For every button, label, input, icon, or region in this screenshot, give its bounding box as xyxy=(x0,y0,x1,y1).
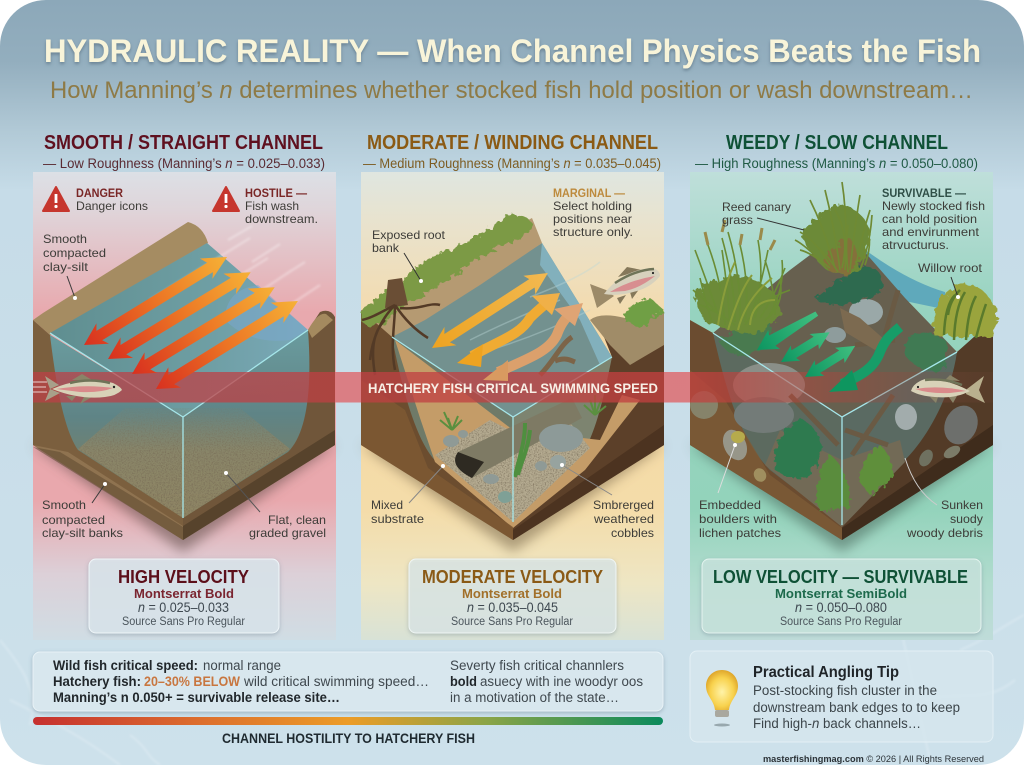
label: marginal: Select holding xyxy=(553,199,632,213)
label: marginal xyxy=(553,186,633,239)
text: left notes: normal range xyxy=(203,658,281,673)
heading: smooth channel: SMOOTH / STRAIGHT CHANNEL xyxy=(44,132,323,154)
label: survivable: atrvucturus. xyxy=(882,238,949,252)
panel: weedy slow channel xyxy=(690,172,998,640)
text: right notes: bold xyxy=(450,674,477,689)
card: moderate velocity: Montserrat Bold xyxy=(462,587,562,601)
text: left notes: 20–30% BELOW xyxy=(144,674,240,689)
label: reed canary grass: grass xyxy=(722,213,753,227)
card: moderate velocity: n = 0.035–0.045 xyxy=(467,600,558,615)
heading: weedy channel xyxy=(695,132,978,171)
label: banks: compacted xyxy=(42,513,105,527)
label: embedded boulders: lichen patches xyxy=(699,526,781,540)
top grass tuft xyxy=(795,182,872,275)
critical swimming speed band: HATCHERY FISH CRITICAL SWIMMING SPEED xyxy=(368,380,658,396)
panel: practical angling tip xyxy=(690,651,993,742)
text: right notes: asuecy with ine woodyr oos xyxy=(480,674,643,689)
label: survivable: Newly stocked fish xyxy=(882,199,985,213)
text: tip xyxy=(753,664,960,731)
text: left notes: wild critical swimming speed… xyxy=(243,674,429,689)
hostility gradient bar xyxy=(33,717,663,725)
heading: smooth channel: — Low Roughness (Manning’s n = 0.025–0.033) xyxy=(43,156,325,171)
fish: weedy channel xyxy=(911,375,985,403)
label: danger: Danger icons xyxy=(76,199,148,213)
block: winding channel cross-section xyxy=(361,214,664,552)
text: tip: Practical Angling Tip xyxy=(753,664,899,681)
label: exposed root bank: bank xyxy=(372,241,400,255)
block: weedy channel cross-section xyxy=(690,182,998,552)
fish: winding channel xyxy=(590,267,660,308)
label: cobbles: weathered xyxy=(593,512,654,526)
label: exposed root bank xyxy=(372,228,446,283)
card: high velocity: Source Sans Pro Regular xyxy=(122,616,245,628)
label: reed canary grass xyxy=(722,200,804,230)
text: right notes xyxy=(450,658,643,705)
label: sunken woody debris: suody xyxy=(950,512,983,526)
footer credit: masterfishingmag.com © 2026 | All Rights Reserved xyxy=(763,754,984,765)
label: mixed substrate: Mixed xyxy=(371,498,403,512)
arrows: moderate velocity xyxy=(426,264,583,381)
card: high velocity: n = 0.025–0.033 xyxy=(138,600,229,615)
label: gravel: graded gravel xyxy=(249,526,326,540)
label: marginal: structure only. xyxy=(553,225,633,239)
panel: smooth straight channel xyxy=(33,172,336,640)
text: right notes: in a motivation of the state… xyxy=(450,690,619,705)
label: clay-silt top xyxy=(43,232,106,300)
label: hostile: Fish wash xyxy=(245,199,299,213)
label: clay-silt top: clay-silt xyxy=(43,260,89,274)
arrows: low velocity xyxy=(751,304,900,392)
critical swimming speed band xyxy=(33,372,993,402)
label: cobbles: cobbles xyxy=(611,526,654,540)
text: left notes: Hatchery fish: xyxy=(53,674,141,689)
heading: moderate channel: — Medium Roughness (Manning’s n = 0.035–0.045) xyxy=(363,156,661,171)
label: marginal: MARGINAL — xyxy=(553,186,625,200)
label: reed canary grass: Reed canary xyxy=(722,200,791,214)
label: banks xyxy=(42,482,123,540)
title: HYDRAULIC REALITY — When Channel Physics Beats the Fish xyxy=(44,33,981,69)
card: moderate velocity: MODERATE VELOCITY xyxy=(422,567,603,587)
bar caption: CHANNEL HOSTILITY TO HATCHERY FISH xyxy=(222,731,475,746)
text: left notes: Manning’s n 0.050+ = survivable release site… xyxy=(53,690,340,705)
card: moderate velocity xyxy=(409,559,616,633)
heading: smooth channel xyxy=(43,132,325,171)
panel: critical speed notes xyxy=(33,652,663,711)
card: low velocity: Montserrat SemiBold xyxy=(775,587,907,601)
label: danger xyxy=(76,186,148,213)
label: sunken woody debris: Sunken xyxy=(941,498,983,512)
grass bank xyxy=(362,214,532,326)
stump and roots xyxy=(385,278,408,308)
heading: weedy channel: WEEDY / SLOW CHANNEL xyxy=(726,132,948,154)
card: low velocity: n = 0.050–0.080 xyxy=(795,600,887,615)
label: hostile xyxy=(245,186,318,226)
label: willow root xyxy=(918,261,983,299)
label: danger: DANGER xyxy=(76,186,123,200)
log xyxy=(458,398,582,478)
fish: smooth channel xyxy=(33,374,122,404)
card: high velocity: HIGH VELOCITY xyxy=(118,567,249,587)
card: moderate velocity: Source Sans Pro Regular xyxy=(451,616,573,628)
cobbles xyxy=(443,424,583,503)
label: embedded boulders: boulders with xyxy=(699,512,777,526)
label: embedded boulders xyxy=(699,443,781,540)
label: clay-silt top: compacted xyxy=(43,246,106,260)
text: tip: downstream bank edges to to keep xyxy=(753,700,960,715)
label: exposed root bank: Exposed root xyxy=(372,228,446,242)
label: willow root: Willow root xyxy=(918,261,983,275)
sunken logs xyxy=(790,290,898,455)
label: embedded boulders: Embedded xyxy=(699,498,761,512)
label: survivable: SURVIVABLE — xyxy=(882,186,966,200)
arrows: high velocity xyxy=(77,246,304,399)
text: tip: Find high-n back channels… xyxy=(753,716,921,731)
label: mixed substrate xyxy=(371,464,445,526)
label: sunken woody debris xyxy=(905,458,983,540)
card: low velocity xyxy=(702,559,981,633)
driftwood xyxy=(540,337,575,375)
card: low velocity: LOW VELOCITY — SURVIVABLE xyxy=(713,567,968,587)
text: left notes: Wild fish critical speed: xyxy=(53,658,198,673)
text: tip: Post-stocking fish cluster in the xyxy=(753,683,937,698)
label: gravel xyxy=(224,471,326,540)
icon: lightbulb xyxy=(706,670,738,726)
panel: moderate winding channel xyxy=(361,172,664,640)
label: clay-silt top: Smooth xyxy=(43,232,87,246)
willow xyxy=(933,284,998,340)
label: hostile: downstream. xyxy=(245,212,318,226)
card: low velocity: Source Sans Pro Regular xyxy=(780,616,902,628)
icon: danger triangle xyxy=(43,187,69,211)
label: sunken woody debris: woody debris xyxy=(906,526,983,540)
label: survivable xyxy=(882,186,985,252)
left grass tuft xyxy=(693,220,790,335)
boulders xyxy=(690,299,984,484)
label: marginal: positions near xyxy=(553,212,632,226)
heading: moderate channel xyxy=(363,132,661,171)
label: survivable: can hold position xyxy=(882,212,977,226)
label: cobbles xyxy=(560,463,654,540)
block: smooth channel cross-section xyxy=(33,222,335,552)
label: cobbles: Smbrerged xyxy=(593,498,654,512)
text: left notes xyxy=(53,658,429,705)
label: banks: Smooth xyxy=(42,498,86,512)
subtitle: How Manning’s n determines whether stocked fish hold position or wash downstream… xyxy=(50,77,973,104)
card: high velocity: Montserrat Bold xyxy=(134,587,234,601)
heading: weedy channel: — High Roughness (Manning’s n = 0.050–0.080) xyxy=(695,156,978,171)
label: mixed substrate: substrate xyxy=(371,512,424,526)
label: banks: clay-silt banks xyxy=(42,526,123,540)
text: right notes: Severty fish critical channlers xyxy=(450,658,624,673)
plants xyxy=(718,267,947,512)
card: high velocity xyxy=(89,559,279,633)
label: gravel: Flat, clean xyxy=(268,513,326,527)
label: survivable: and envirunment xyxy=(882,225,980,239)
heading: moderate channel: MODERATE / WINDING CHANNEL xyxy=(367,132,658,154)
icon: hostile triangle xyxy=(213,187,239,211)
label: hostile: HOSTILE — xyxy=(245,186,307,200)
